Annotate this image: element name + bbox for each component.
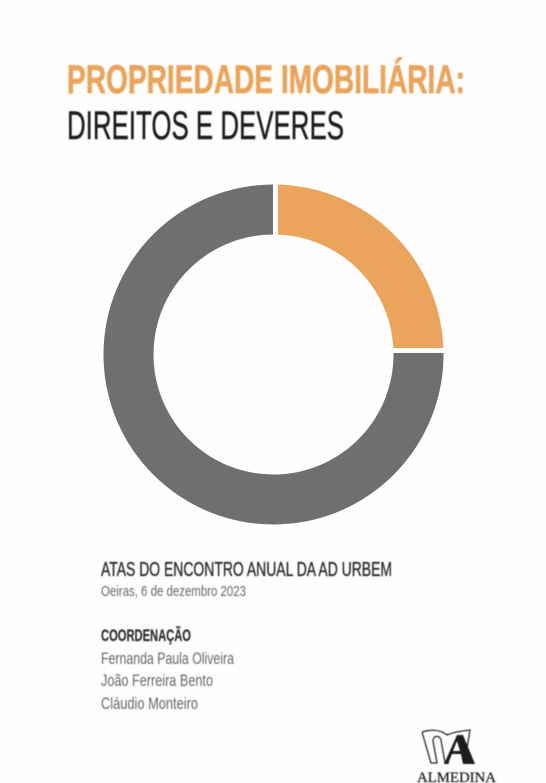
icon: open book with letter A [422, 730, 475, 764]
event information [101, 559, 392, 600]
title line 2: DIREITOS E DEVERES [67, 104, 344, 148]
coordination [101, 625, 235, 713]
coordinator 2: João Ferreira Bento [101, 672, 213, 690]
coordination heading: COORDENAÇÃO [101, 625, 191, 645]
donut chart [103, 184, 443, 524]
coordinator 1: Fernanda Paula Oliveira [101, 650, 235, 668]
donut segment: orange [278, 185, 443, 348]
event heading: ATAS DO ENCONTRO ANUAL DA AD URBEM [101, 559, 392, 581]
donut segment: grey [103, 184, 443, 524]
title [67, 57, 465, 148]
event place and date: Oeiras, 6 de dezembro 2023 [101, 583, 246, 600]
coordinator 3: Cláudio Monteiro [101, 695, 198, 713]
publisher logo [417, 730, 496, 783]
